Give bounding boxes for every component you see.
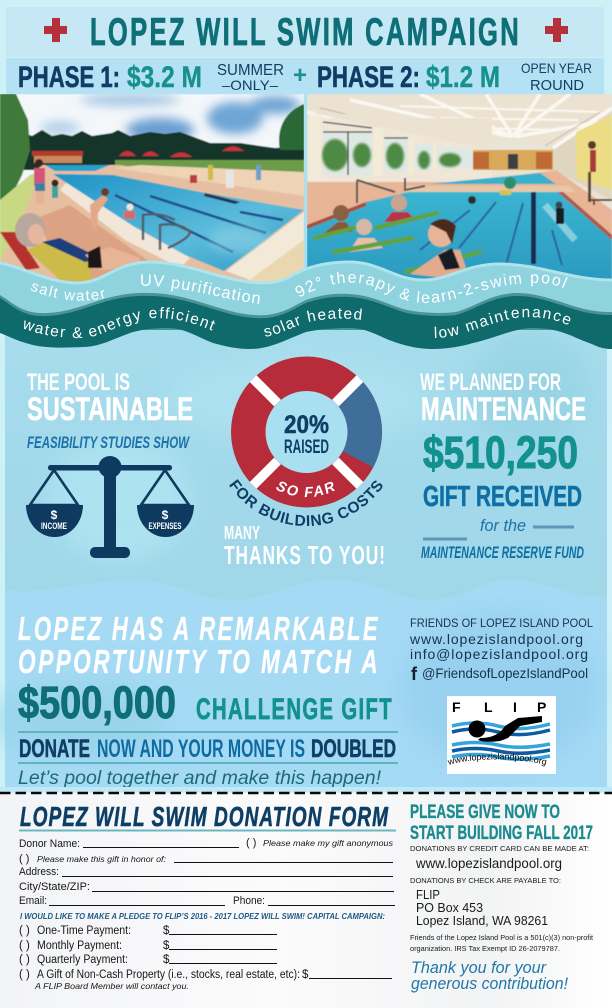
thank you note (411, 958, 568, 993)
payment options: Quarterly Payment: (37, 954, 128, 966)
summer only note (217, 62, 284, 93)
expenses pan label: EXPENSES (148, 521, 182, 531)
phase 1 label: PHASE 1: (18, 61, 120, 94)
form fields (19, 837, 394, 907)
income pan label: $ (51, 508, 58, 522)
amount: gift value: $510,250 (423, 427, 578, 478)
heading: planned for maintenance (420, 369, 586, 427)
feature: therapy pool: 92° therapy & learn-2-swim pool (295, 272, 568, 304)
payment options (19, 925, 309, 991)
panel: challenge gift (18, 610, 398, 789)
heading: the pool is sustainable: SUSTAINABLE (27, 391, 193, 427)
icon: left red cross (44, 18, 67, 42)
logo: FLIP: F (452, 699, 461, 715)
center value: 20% (284, 411, 329, 439)
summer only note: SUMMER (217, 62, 284, 79)
open year round note: ROUND (530, 77, 584, 94)
payment options: $ (163, 925, 170, 937)
contact details: info@lopezislandpool.org (410, 646, 588, 662)
summer only note: –ONLY– (222, 77, 278, 93)
tagline: Let’s pool together and make this happen! (18, 768, 382, 789)
payment options: $ (163, 954, 170, 966)
feature: low maintenance: low maintenance (434, 308, 570, 338)
phase 2 label: PHASE 2: (317, 61, 420, 94)
form fields: Email: (19, 895, 47, 907)
thank you note: generous contribution! (411, 974, 568, 993)
icon: right red cross (545, 18, 568, 42)
feature: solar heated: solar heated (264, 308, 362, 336)
chart: life ring 20 percent raised (229, 356, 382, 526)
payment instructions (410, 844, 594, 953)
form fields: ( ) (19, 853, 29, 865)
form fields: City/State/ZIP: (19, 881, 90, 893)
form fields: Please make this gift in honor of: (37, 854, 167, 864)
payment options: A FLIP Board Member will contact you. (34, 982, 189, 991)
contact details: @FriendsofLopezIslandPool (422, 665, 588, 681)
expenses pan label (148, 508, 182, 531)
payment options: ( ) (19, 954, 30, 966)
contact details: www.lopezislandpool.org (409, 631, 583, 647)
logo: FLIP (447, 696, 556, 774)
headline: remarkable opportunity: LOPEZ HAS A REMARKABLE (18, 610, 380, 647)
feature: water and energy efficient: water & energy efficient (24, 307, 216, 338)
center label: RAISED (284, 437, 329, 458)
payment options: ( ) (19, 925, 30, 937)
payment instructions: DONATIONS BY CREDIT CARD CAN BE MADE AT: (410, 844, 589, 853)
open year round note (521, 60, 592, 94)
panel: sustainable (26, 369, 194, 558)
logo: FLIP: L (484, 699, 493, 715)
payment options: Monthly Payment: (37, 940, 122, 952)
income pan label (41, 508, 67, 531)
heading: the pool is sustainable (27, 369, 193, 427)
payment instructions: FLIP (416, 888, 440, 902)
payment options: ( ) (19, 969, 30, 981)
payment instructions: PO Box 453 (416, 901, 483, 915)
thanks message (224, 523, 386, 570)
headline: remarkable opportunity (18, 610, 380, 680)
form fields: Please make my gift anonymous (263, 838, 394, 848)
contact details (409, 616, 593, 684)
logo: FLIP: P (537, 699, 546, 715)
subheading: feasibility studies: FEASIBILITY STUDIES SHOW (27, 433, 190, 452)
give now heading (410, 802, 593, 844)
logo: FLIP: I (513, 699, 517, 715)
open year round note: OPEN YEAR (521, 60, 592, 76)
thank you note: Thank you for your (411, 958, 547, 977)
phase 1 amount: $3.2 M (127, 61, 202, 94)
form fields: ( ) (246, 837, 256, 849)
thanks message: MANY (224, 523, 260, 543)
form fields: Address: (19, 866, 59, 878)
form rules (49, 848, 395, 978)
form title: LOPEZ WILL SWIM DONATION FORM (20, 801, 389, 832)
payment options: One-Time Payment: (37, 925, 131, 937)
feature: UV purification: UV purification (141, 274, 260, 304)
thanks message: THANKS TO YOU! (224, 540, 386, 570)
payment instructions: www.lopezislandpool.org (415, 855, 562, 871)
payment options: A Gift of Non-Cash Property (i.e., stocks, real estate, etc): (37, 969, 300, 981)
payment options: ( ) (19, 940, 30, 952)
ring label: so far: SO FAR (276, 482, 335, 498)
donate now message: DOUBLED (311, 735, 396, 763)
icon: balance scale (26, 456, 194, 558)
payment instructions: organization. IRS Tax Exempt ID 26-2079787. (410, 944, 560, 953)
top title band (6, 7, 604, 57)
panel: maintenance (420, 369, 586, 562)
form fields: Donor Name: (19, 838, 80, 850)
for the: for the (480, 516, 526, 535)
expenses pan label: $ (162, 508, 169, 522)
heading: the pool is sustainable: THE POOL IS (27, 369, 130, 396)
payment instructions: Lopez Island, WA 98261 (416, 914, 548, 928)
form fields: Phone: (233, 895, 265, 907)
icon: facebook f: f (411, 664, 418, 684)
phase cost band (6, 58, 604, 94)
payment options: $ (302, 969, 309, 981)
feature: salt water: salt water (30, 283, 104, 301)
donate now message: NOW AND YOUR MONEY IS (97, 735, 305, 763)
amount: challenge value: $500,000 (18, 677, 176, 728)
payment instructions: Friends of the Lopez Island Pool is a 501(c)(3) non-profit (410, 933, 594, 942)
contact details: FRIENDS OF LOPEZ ISLAND POOL (410, 616, 593, 630)
painting: indoor year-round pool (307, 94, 612, 289)
challenge gift label: CHALLENGE GIFT (196, 693, 393, 726)
income pan label: INCOME (41, 521, 67, 531)
light wave banner (0, 260, 612, 316)
payment options: $ (163, 940, 170, 952)
ring caption: for building costs: FOR BUILDING COSTS (229, 479, 382, 526)
phase 2 amount: $1.2 M (426, 61, 500, 94)
payment instructions: DONATIONS BY CHECK ARE PAYABLE TO: (410, 876, 561, 885)
logo: FLIP: www.lopezislandpool.org (448, 752, 546, 766)
donation form panel (0, 787, 612, 1008)
plus sign: + (293, 62, 307, 89)
pledge line: I WOULD LIKE TO MAKE A PLEDGE TO FLIP’S 2016 - 2017 LOPEZ WILL SWIM! CAPITAL CAMPAIGN: (20, 911, 385, 921)
headline: remarkable opportunity: OPPORTUNITY TO MATCH A (18, 643, 380, 680)
painting: outdoor summer pool (0, 94, 304, 289)
dark wave banner (0, 292, 612, 349)
donate now message: DONATE (19, 735, 90, 763)
